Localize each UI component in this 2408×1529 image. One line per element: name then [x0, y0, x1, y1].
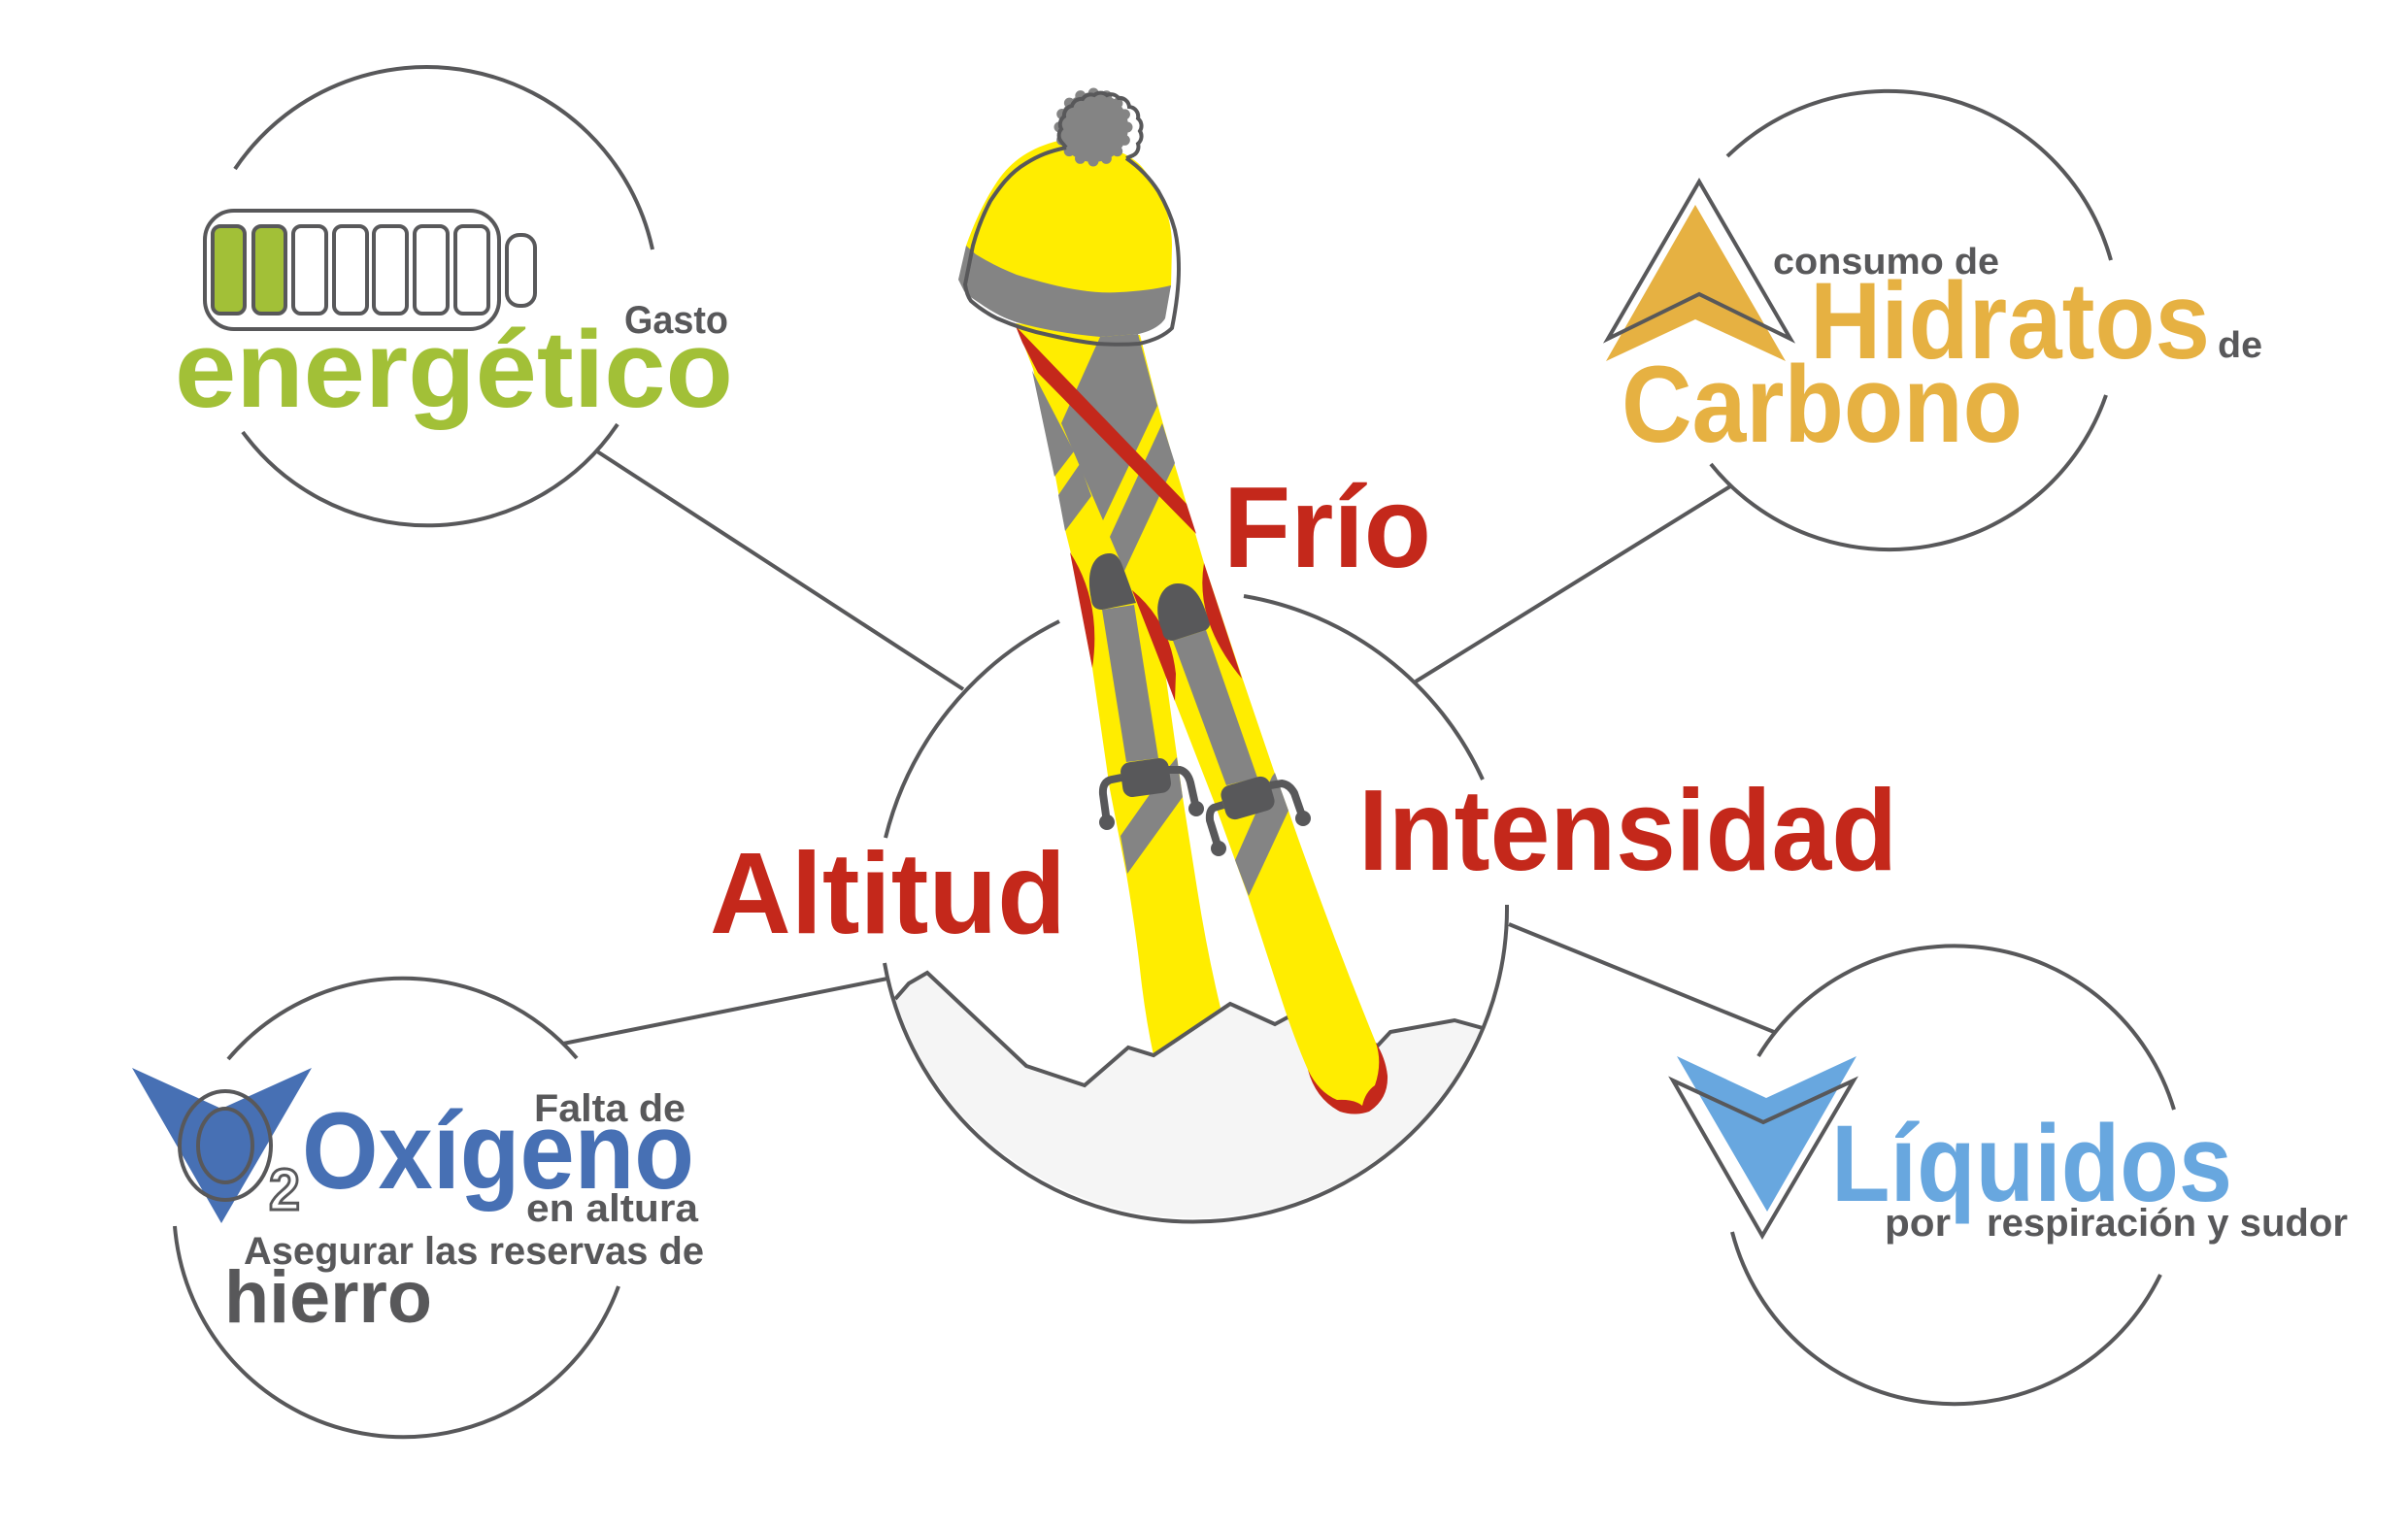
text: Altitud: Altitud	[710, 829, 1066, 958]
text: Gasto: Gasto	[624, 299, 728, 342]
text: de: de	[2218, 325, 2262, 366]
panel: hidratos de carbono	[1606, 91, 2262, 549]
text: Líquidos: Líquidos	[1831, 1103, 2232, 1224]
circle: carbohydrate panel outline	[1711, 91, 2111, 549]
text: hierro: hierro	[224, 1256, 432, 1339]
text: Intensidad: Intensidad	[1358, 766, 1897, 895]
icon: hat with pompom	[958, 92, 1179, 345]
text: Frío: Frío	[1223, 463, 1431, 592]
circle: oxygen panel outline	[175, 979, 619, 1437]
icon: down arrow	[1673, 1056, 1856, 1236]
text: en altura: en altura	[526, 1187, 699, 1230]
text: Asegurar las reservas de: Asegurar las reservas de	[244, 1230, 704, 1273]
text: Hidratos: Hidratos	[1810, 260, 2210, 382]
text: energético: energético	[175, 309, 733, 430]
panel: oxígeno y hierro	[132, 979, 704, 1437]
icon: down arrow with O2: 2	[269, 1157, 300, 1222]
snow ground	[885, 905, 1507, 1221]
text: respiración y sudor: respiración y sudor	[1987, 1202, 2348, 1245]
icon: down arrow with O2	[132, 1068, 312, 1223]
text: consumo de: consumo de	[1773, 242, 1999, 283]
panel: central circle with skier	[710, 92, 1897, 1221]
panel: gasto energético	[175, 67, 733, 525]
circle: central outline arcs	[886, 596, 1483, 838]
circle: energy panel outline	[235, 67, 652, 525]
text: Carbono: Carbono	[1622, 344, 2023, 465]
connector lines	[563, 451, 1774, 1044]
circle: liquids panel outline	[1732, 946, 2174, 1404]
text: Oxígeno: Oxígeno	[302, 1090, 694, 1212]
icon: up arrow	[1606, 182, 1790, 361]
skis and scarf figure	[1014, 321, 1388, 1114]
text: por: por	[1885, 1202, 1951, 1245]
icon: battery	[205, 211, 535, 329]
panel: líquidos	[1673, 946, 2348, 1404]
text: Falta de: Falta de	[534, 1087, 686, 1130]
